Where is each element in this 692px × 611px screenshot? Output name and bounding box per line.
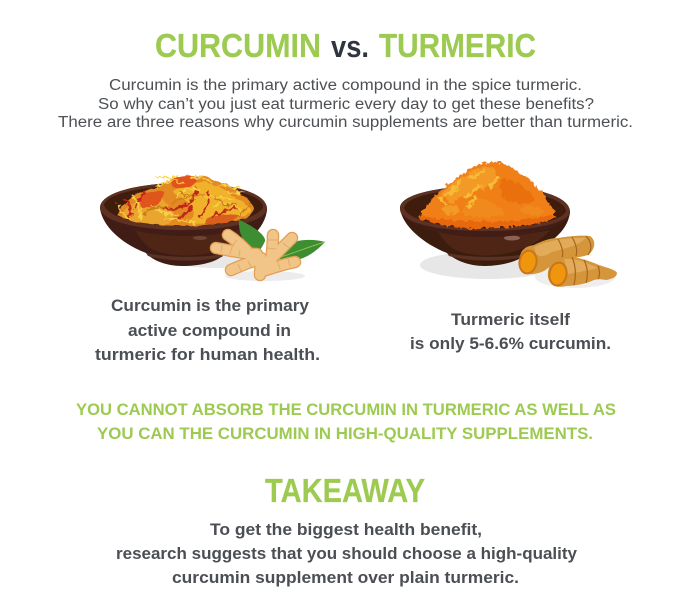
caption: turmeric: Turmeric itself [451,311,571,329]
illustration: bowl of curcumin with ginger root [100,176,325,281]
leaves [239,220,265,252]
ginger root [216,235,295,275]
intro text: So why can’t you just eat turmeric every day to get these benefits? [98,96,594,113]
intro text: There are three reasons why curcumin supplements are better than turmeric. [58,114,633,131]
caption: curcumin: Curcumin is the primary [111,297,310,315]
illustration: bowl of turmeric powder with roots [400,162,617,288]
ginger shadow [225,271,305,281]
key message: YOU CAN THE CURCUMIN IN HIGH-QUALITY SUPPLEMENTS. [97,424,593,443]
turmeric root back [519,236,594,274]
takeaway text: To get the biggest health benefit, [210,521,482,539]
caption: curcumin: active compound in [128,322,291,340]
takeaway text: curcumin supplement over plain turmeric. [172,569,519,587]
caption: curcumin [95,297,320,364]
root shadow [535,266,615,288]
takeaway text [116,521,578,587]
takeaway text: research suggests that you should choose a high-quality [116,545,578,563]
key message: YOU CANNOT ABSORB THE CURCUMIN IN TURMERIC AS WELL AS [76,400,616,419]
caption: turmeric [410,311,611,353]
takeaway heading: TAKEAWAY [265,472,425,509]
turmeric root front [548,257,617,287]
title: CURCUMIN [155,27,321,64]
title: vs. [331,29,369,64]
caption: turmeric: is only 5-6.6% curcumin. [410,335,611,353]
intro text: Curcumin is the primary active compound in the spice turmeric. [109,77,582,94]
key message [76,400,616,443]
title [155,27,536,64]
title: TURMERIC [379,27,536,64]
caption: curcumin: turmeric for human health. [95,346,320,364]
powder mound [419,162,555,228]
intro text [58,77,633,131]
